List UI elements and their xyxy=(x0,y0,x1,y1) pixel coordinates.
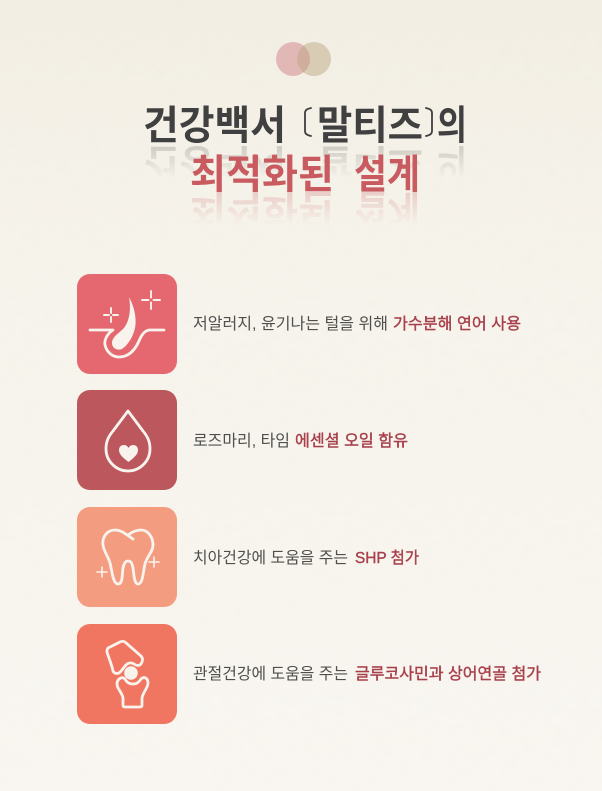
text: hair benefit: 저알러지, 윤기나는 털을 위해 xyxy=(193,315,388,333)
icon: joint xyxy=(77,624,177,724)
text: dental benefit: 치아건강에 도움을 주는 xyxy=(193,549,348,567)
title: 설계 xyxy=(354,153,420,197)
text: joint benefit: 관절건강에 도움을 주는 xyxy=(193,665,348,683)
title reflection: 말티즈 xyxy=(317,141,423,185)
title: 건강백서 xyxy=(143,104,286,148)
text: oil benefit: 에센셜 오일 함유 xyxy=(295,432,408,450)
title reflection xyxy=(143,141,467,230)
title: 말티즈 xyxy=(317,104,423,148)
text: dental benefit xyxy=(193,549,419,567)
text: joint benefit xyxy=(193,665,541,683)
text: joint benefit: 글루코사민과 상어연골 첨가 xyxy=(355,665,541,683)
icon: hair follicle xyxy=(77,274,177,374)
title: 의 xyxy=(437,104,467,148)
text: dental benefit: SHP 첨가 xyxy=(355,549,419,567)
title reflection: 최적화된 xyxy=(190,186,334,230)
icon: tooth xyxy=(77,507,177,607)
text: oil benefit: 로즈마리, 타임 xyxy=(193,432,290,450)
text: hair benefit xyxy=(193,315,521,333)
text: oil benefit xyxy=(193,432,408,450)
title: 최적화된 xyxy=(190,153,334,197)
title reflection: 설계 xyxy=(354,186,420,230)
decorative overlapping circles xyxy=(276,42,331,76)
title reflection: 의 xyxy=(437,141,467,185)
icon: oil drop with heart xyxy=(77,390,177,490)
text: hair benefit: 가수분해 연어 사용 xyxy=(393,315,521,333)
title xyxy=(143,104,467,197)
title reflection: 건강백서 xyxy=(143,141,286,185)
